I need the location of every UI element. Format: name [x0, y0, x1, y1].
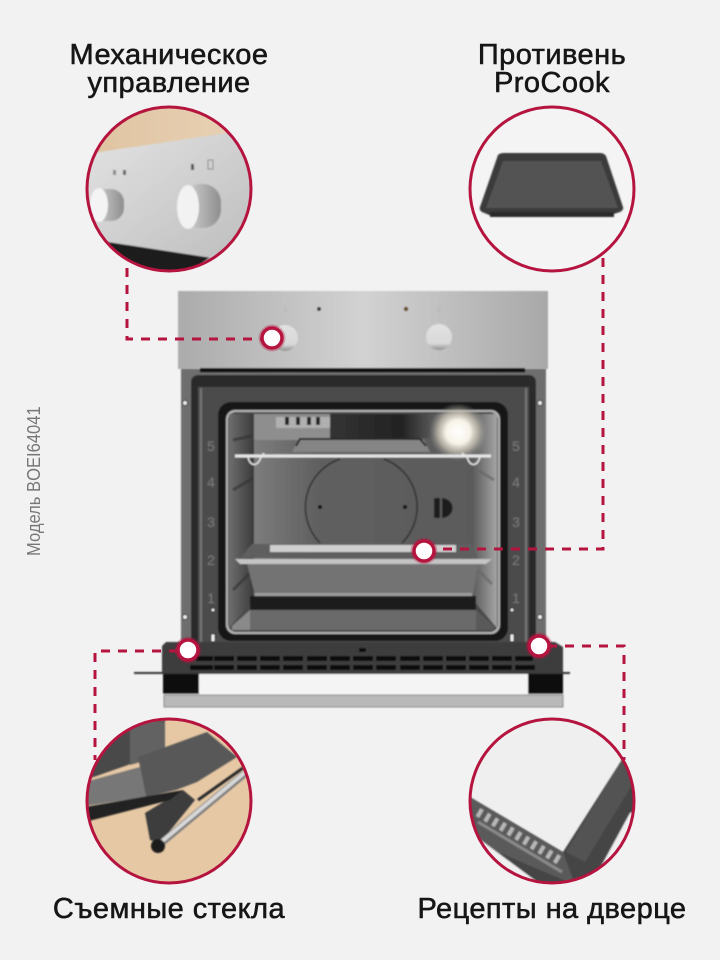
cavity black frame: [218, 402, 508, 641]
model label: Модель BOEI64041: [24, 406, 44, 556]
rack numbers: 1: [512, 590, 520, 606]
rack numbers: 4: [207, 474, 215, 490]
control panel: [178, 291, 548, 372]
top grill: [276, 417, 330, 428]
connector lines: [95, 258, 624, 760]
baking tray in oven: [235, 544, 492, 596]
rack numbers: 2: [207, 552, 215, 568]
rack numbers: 1: [207, 590, 215, 606]
upper rack: [235, 453, 491, 464]
rack numbers: 2: [512, 552, 520, 568]
rack numbers: 3: [207, 514, 215, 530]
circle: mechanical control: [80, 100, 260, 272]
heading: removable glass: Съемные стекла: [53, 893, 285, 925]
heading: ProCook tray: [478, 39, 626, 99]
heading: mechanical control: Механическое: [70, 39, 268, 71]
hotspot markers: [176, 326, 551, 662]
fan arc: [305, 459, 417, 543]
left knob: [272, 325, 298, 351]
rack numbers: 5: [207, 438, 215, 454]
oven: [181, 368, 546, 646]
door handle: [164, 695, 563, 707]
heading: mechanical control: управление: [87, 67, 251, 99]
door: [134, 642, 570, 707]
grill symbol: [434, 498, 452, 518]
heading: ProCook tray: ProCook: [494, 67, 610, 99]
heading: recipes on door: Рецепты на дверце: [417, 893, 687, 925]
heading: mechanical control: [70, 39, 268, 99]
body screws: [182, 400, 542, 642]
circle: removable glass: [85, 719, 251, 883]
rack numbers: [207, 438, 520, 606]
main illustration: [86, 106, 636, 884]
oven lamp: [429, 403, 487, 461]
right knob: [426, 324, 452, 350]
door vents: [190, 648, 535, 670]
cavity: [226, 403, 500, 634]
rack numbers: 3: [512, 514, 520, 530]
rack numbers: 5: [512, 438, 520, 454]
door gap and glass: [163, 674, 563, 695]
heading: ProCook tray: Противень: [478, 39, 626, 71]
oven body frame: [181, 368, 546, 646]
circle: recipes on door: [470, 719, 640, 885]
rack numbers: 4: [512, 474, 520, 490]
circle: ProCook tray: [470, 107, 634, 271]
